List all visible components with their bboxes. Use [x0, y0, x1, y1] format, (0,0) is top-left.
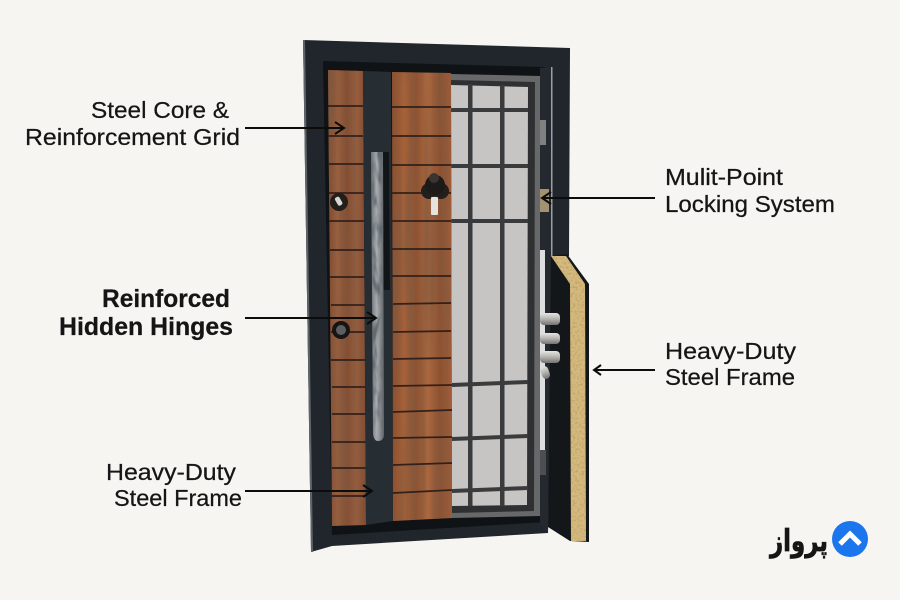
logo: [768, 521, 868, 559]
label: locking system: [665, 164, 835, 217]
arrow: hidden hinges: [245, 312, 376, 324]
label: hidden hinges: [59, 285, 233, 341]
pull handle: [370, 150, 390, 442]
wood panel: left: [328, 70, 366, 526]
door edge: [540, 67, 552, 533]
glass panes and bars: [451, 84, 528, 506]
label: steel frame left: Heavy-Duty: [106, 459, 236, 485]
dark centre stile: [363, 71, 393, 525]
label: steel core: Reinforcement Grid: [25, 124, 240, 150]
strike plate: [540, 189, 549, 212]
cut-away panel: [548, 254, 589, 542]
plank grooves: [328, 106, 452, 496]
label: hidden hinges: Reinforced: [102, 285, 230, 313]
locking bolts: [539, 313, 560, 380]
upper hinge: [540, 120, 546, 145]
label: steel frame left: [106, 459, 242, 511]
main lock: [421, 173, 449, 215]
frame highlight: [303, 40, 313, 552]
label: steel frame right: Heavy-Duty: [665, 338, 796, 364]
label: steel core: Steel Core &: [91, 97, 229, 123]
window frame: [451, 74, 540, 518]
label: hidden hinges: Hidden Hinges: [59, 313, 233, 341]
label: steel core: [25, 97, 240, 150]
label: locking system: Locking System: [665, 191, 835, 217]
outer steel frame: [303, 40, 570, 552]
arrow: steel frame right: [594, 365, 655, 375]
white lock strip: [540, 250, 545, 450]
logo wordmark: پرواز: [768, 524, 828, 559]
upper knob: [330, 193, 348, 211]
logo badge: [832, 521, 868, 557]
light strip on edge: [551, 67, 552, 257]
lower knob: [332, 321, 350, 339]
foam core: [550, 255, 587, 542]
arrow: steel core: [245, 122, 344, 134]
arrow: steel frame left: [245, 485, 372, 497]
wood panel: right: [392, 72, 452, 521]
label: locking system: Mulit-Point: [665, 164, 783, 190]
door illustration: [303, 40, 589, 552]
lower hinge: [540, 450, 546, 475]
inner recess: [323, 61, 547, 535]
arrow: locking system: [542, 192, 655, 204]
label: steel frame right: Steel Frame: [665, 364, 795, 390]
label: steel frame left: Steel Frame: [114, 485, 242, 511]
label: steel frame right: [665, 338, 796, 390]
